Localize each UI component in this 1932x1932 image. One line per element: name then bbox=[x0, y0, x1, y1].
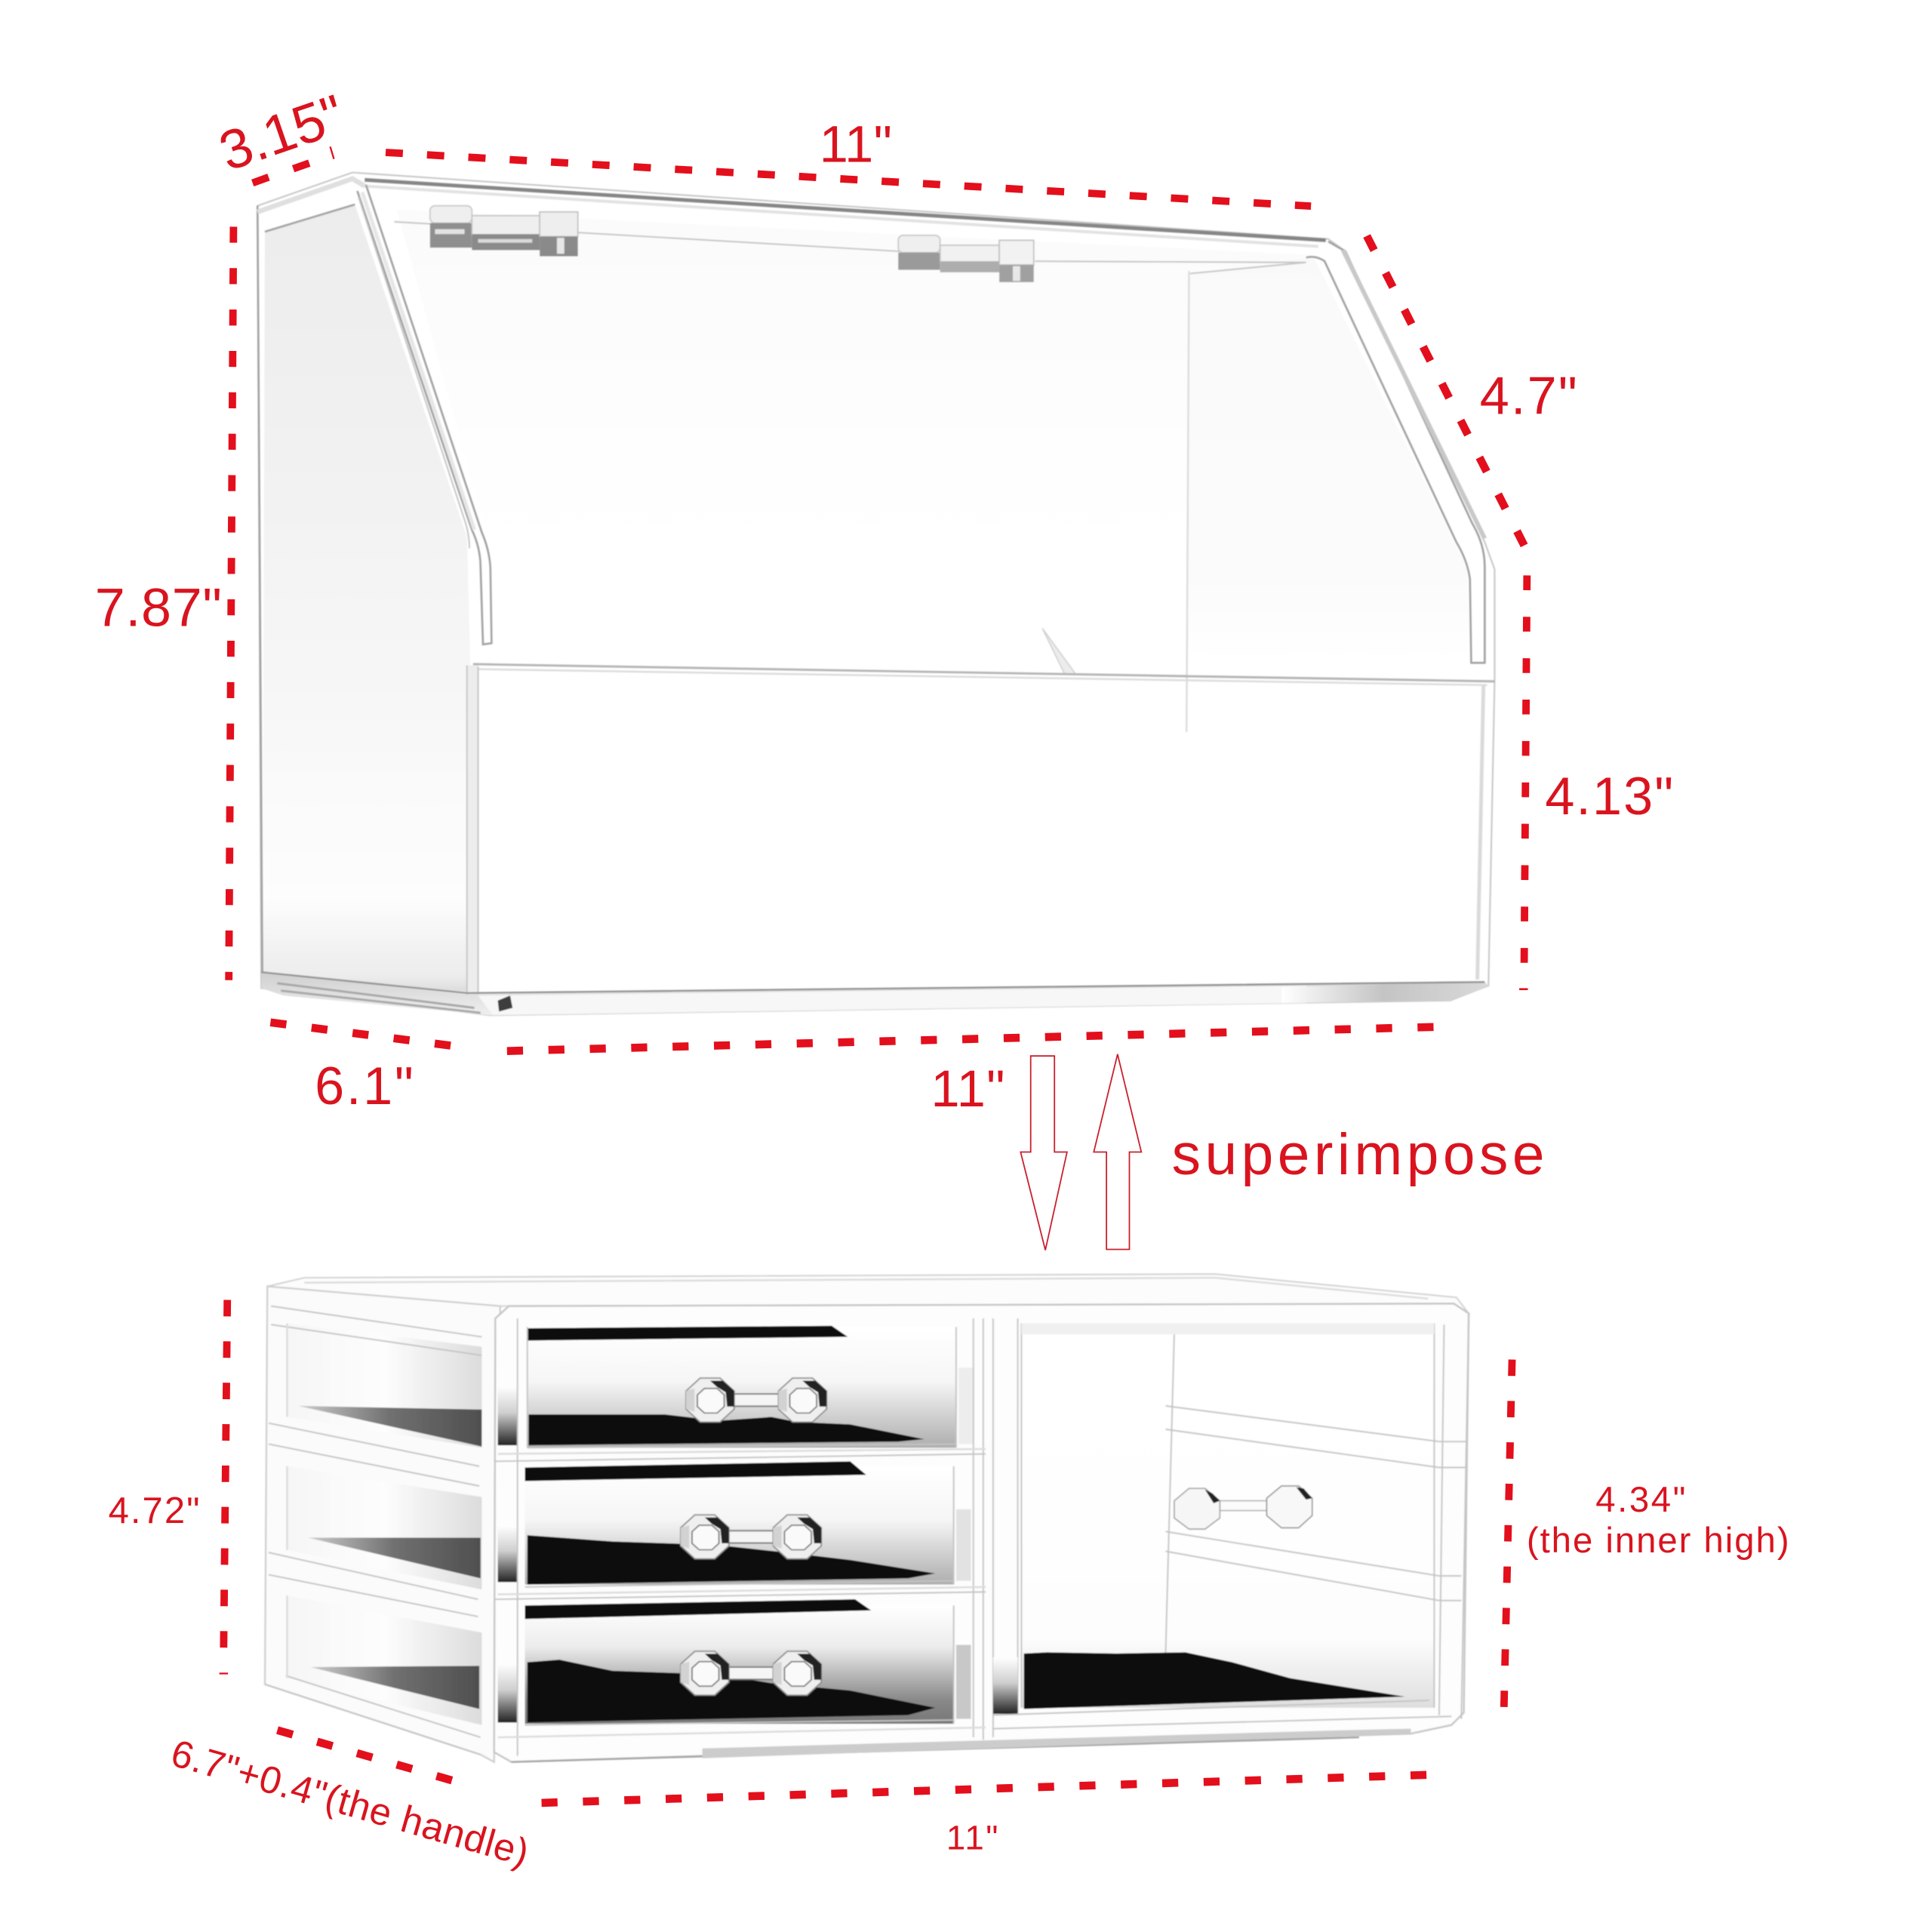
dashed line: lower 11 of upper box bbox=[507, 1027, 1434, 1051]
label superimpose: superimpose bbox=[1172, 1123, 1545, 1187]
side outer bbox=[265, 1286, 500, 1762]
hinge line on lid bbox=[394, 222, 1306, 273]
label 4.13: 4.13" bbox=[1545, 766, 1673, 826]
side felt 1 bbox=[298, 1406, 481, 1447]
left drawer windows bbox=[528, 1327, 956, 1447]
lid front tint bbox=[397, 210, 1318, 672]
handle right drawer bbox=[1174, 1486, 1312, 1529]
front frame bbox=[494, 1303, 1469, 1762]
label 4.7: 4.7" bbox=[1480, 366, 1577, 426]
dashed line: 3.15 depth bbox=[253, 146, 334, 183]
arrow: up bbox=[1094, 1054, 1141, 1250]
right lid edge bbox=[1306, 242, 1484, 663]
base plate bbox=[261, 972, 1488, 1015]
dashed line: 6.1 depth bbox=[270, 1023, 451, 1046]
inner vertical edge bbox=[1186, 271, 1189, 732]
side window 1 bbox=[287, 1323, 481, 1447]
label 3.15: 3.15" bbox=[211, 82, 352, 183]
right front edge bbox=[1478, 685, 1484, 980]
felt drawer 1 bbox=[528, 1414, 924, 1445]
column shadows bbox=[498, 1386, 518, 1445]
wedge reflection bbox=[1042, 629, 1075, 674]
lower drawer unit product bbox=[265, 1274, 1469, 1762]
felt drawer 3 bbox=[528, 1660, 935, 1722]
right side panel bbox=[1188, 257, 1470, 675]
right drawer inner lines bbox=[1165, 1334, 1466, 1654]
dashed line: 4.13 height bbox=[1519, 575, 1527, 990]
front panel top line bbox=[473, 664, 1494, 681]
outer lid and body outline bbox=[257, 173, 1494, 1015]
right drawer felt bbox=[1024, 1652, 1404, 1709]
top black strips bbox=[528, 1326, 848, 1340]
handle drawer 3 bbox=[681, 1651, 821, 1695]
dashed line: top 11 bbox=[386, 152, 1311, 206]
top surface bbox=[267, 1274, 1469, 1313]
right column shadows bbox=[958, 1367, 974, 1444]
left lid edge bbox=[357, 185, 491, 645]
label 6.7 handle: 6.7"+0.4"(the handle) bbox=[167, 1731, 534, 1875]
upper lid box product bbox=[257, 173, 1494, 1015]
label 4.34: 4.34" bbox=[1595, 1480, 1685, 1520]
dashed line: 4.72 height bbox=[220, 1300, 228, 1675]
felt drawer 2 bbox=[528, 1535, 935, 1585]
dashed line: drawer 11 bbox=[542, 1775, 1426, 1803]
dashed line: 4.7 slope bbox=[1367, 236, 1524, 546]
front left vertical edge bbox=[467, 666, 478, 995]
side felt 2 bbox=[308, 1538, 481, 1578]
label 7.87: 7.87" bbox=[95, 577, 222, 638]
dashed line: 7.87 height bbox=[229, 226, 233, 980]
side window 3 bbox=[287, 1595, 481, 1725]
label the inner high: (the inner high) bbox=[1527, 1521, 1789, 1561]
dashed line: 6.7 depth bbox=[278, 1730, 453, 1780]
side drawer seams bbox=[265, 1306, 481, 1755]
right drawer window bbox=[1021, 1323, 1434, 1708]
right drawer shadow column bbox=[993, 1657, 1018, 1714]
label 4.72: 4.72" bbox=[109, 1491, 199, 1531]
label top 11: 11" bbox=[820, 115, 892, 174]
arrow: down bbox=[1020, 1056, 1067, 1250]
label middle 11: 11" bbox=[931, 1060, 1004, 1118]
top bar of lid bbox=[365, 180, 1326, 240]
handle drawer 2 bbox=[681, 1515, 821, 1559]
right drawer bottom edge bbox=[993, 1700, 1451, 1729]
label bottom 11: 11" bbox=[946, 1819, 998, 1857]
dashed line: 4.34 inner height bbox=[1504, 1359, 1512, 1707]
hinge right bbox=[898, 235, 1034, 282]
hinge left bbox=[430, 206, 578, 257]
side felt 3 bbox=[310, 1666, 479, 1709]
label 6.1: 6.1" bbox=[315, 1056, 414, 1115]
handle drawer 1 bbox=[686, 1378, 826, 1422]
side window 2 bbox=[287, 1466, 481, 1589]
side panel bbox=[263, 205, 471, 992]
frame seams bbox=[518, 1318, 1018, 1756]
